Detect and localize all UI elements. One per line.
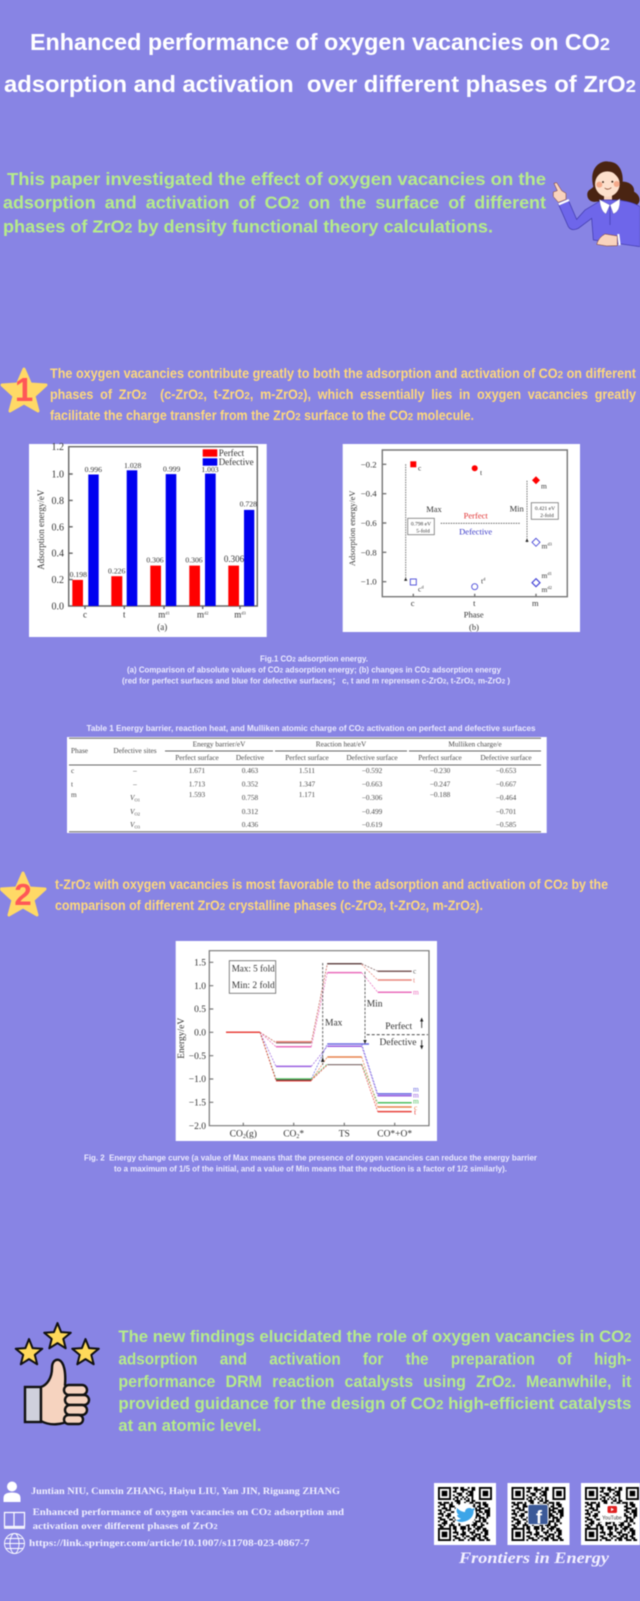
row m: m [71,790,77,799]
x axis labels: CO [283,1130,296,1140]
max and min markers [321,963,383,1065]
x axis labels: (a) [157,622,167,632]
dark level accents [276,964,362,1080]
defective series t d [226,1032,412,1112]
y axis labels: −0.8 [361,547,377,557]
section 2 text: t-ZrO2 with oxygen vacancies is most favorable to the adsorption and activation of CO2 by the [55,877,608,892]
row c: −0.592 [362,766,383,775]
marker labels: d [421,585,424,590]
value labels: 0.996 [85,465,102,474]
x axis labels: c [83,610,87,620]
row c: 0.463 [242,766,259,775]
y axis labels: −0.5 [189,1052,206,1062]
series labels: t [414,1108,417,1116]
marker labels: d [483,576,486,581]
row t: 0.352 [242,780,259,789]
perfect surface markers [410,461,540,484]
icon: globe [4,1534,24,1554]
series labels: t [413,976,416,984]
y axis labels: 1.5 [194,958,206,968]
y axis labels: −0.4 [361,489,377,499]
table title: Table 1 Energy barrier, reaction heat, and Mulliken atomic charge of CO 2 activation on perfect and defective surfaces [86,724,536,733]
row m: V [130,807,134,816]
plot frame and ticks [209,951,429,1126]
header rows: Perfect surface [418,753,462,762]
x axis labels: c [411,598,415,608]
marker labels: c [418,585,421,594]
row m: 0.436 [242,820,259,829]
header rows: Defective [236,753,264,762]
defective series m d1 [260,1032,412,1096]
paper title: activation over different phases of ZrO 2 [33,1522,218,1532]
value labels: 0.728 [240,500,257,509]
conclusion text block: The new findings elucidated the role of oxygen vacancies in CO2 [118,1327,631,1346]
callout: max: 5-fold [416,528,430,534]
row c: −0.653 [496,766,517,775]
icon: thumbs up with stars [16,1323,99,1424]
section 1 text [50,366,636,423]
x axis labels: d3 [241,611,247,616]
plot frame and ticks [69,447,257,609]
row c: – [132,766,137,775]
y axis labels: 1.0 [52,470,64,480]
legend: Perfect [219,448,245,458]
max and min markers: Min [367,1000,383,1010]
marker labels: t [481,576,483,585]
three stars [16,1323,99,1364]
y axis title: Adsorption energy/eV [347,490,357,566]
x axis labels: 2 [296,1134,299,1140]
header rows: Mulliken charge/e [448,740,502,749]
x axis labels: (b) [469,622,479,632]
y axis labels: −2.0 [189,1122,206,1132]
conclusion text block [118,1327,632,1435]
paper title: Enhanced performance of oxygen vacancies on CO 2 adsorption and [33,1508,345,1518]
row c: −0.230 [430,766,451,775]
perfect and defective labels: Perfect [464,510,488,520]
value labels: 0.306 [146,556,164,565]
marker labels: d1 [547,571,552,576]
marker labels [418,464,553,594]
legend [203,448,254,467]
x axis labels: TS [339,1130,350,1140]
header rows: Reaction heat/eV [316,740,367,749]
figure 1 caption: (red for perfect surfaces and blue for defective surfaces； c, t and m reprensen c-ZrO2, t-ZrO2, m-ZrO2 ) [122,677,510,687]
row m: O3 [134,824,141,830]
x axis labels: t [123,610,126,620]
callout: min [510,503,558,519]
figure 1 caption [122,655,510,687]
defective series m d3 [260,1032,412,1103]
x axis labels [411,598,539,632]
row m: O2 [134,812,140,816]
figure 2 caption: to a maximum of 1/5 of the initial, and a value of Min means that the reduction is a factor of 1/2 similarly). [114,1164,507,1174]
y axis labels: −1.0 [361,577,377,587]
x axis labels: d2 [204,611,208,616]
row m: 1.593 [189,790,206,799]
header rows [71,740,532,762]
row m: −0.464 [496,793,517,802]
header rows: Phase [71,746,88,755]
section 2 badge [1,873,45,915]
callout: max: 0.798 eV [411,522,431,528]
y axis labels: 0.4 [52,549,64,560]
paper title [33,1508,345,1532]
value labels: 0.198 [70,570,87,579]
series labels: c [414,1103,418,1112]
intro text block: adsorption and activation of CO 2 on the surface of different [3,193,546,213]
x axis labels: (g) [246,1129,257,1140]
intro text block: This paper investigated the effect of oxygen vacancies on the [7,169,546,189]
scatter chart: adsorption energy by phase [343,444,580,632]
defective series m d2 [260,1032,412,1094]
section 2 text: comparison of different ZrO2 crystalline phases (c-ZrO2, t-ZrO2, m-ZrO2). [55,898,483,913]
header rows: Energy barrier/eV [193,740,246,749]
y axis labels: −0.6 [361,518,377,528]
callout: min: 0.421 eV [535,506,555,512]
x axis labels [230,1129,412,1140]
table: energy barrier, reaction heat, Mulliken charge [67,737,547,833]
row t: −0.247 [430,780,451,789]
row m: O1 [134,798,140,802]
value labels: 1.028 [124,461,142,470]
row t [71,780,517,789]
y axis labels: 0.5 [194,1005,206,1015]
legend box: Max: 5 fold [232,964,275,975]
perfect and defective labels [459,510,492,537]
conclusion text block: performance DRM reaction catalysts using ZrO2. Meanwhile, it [118,1372,632,1391]
figure 2 caption [84,1154,537,1174]
conclusion text block: provided guidance for the design of CO2 high-efficient catalysts [118,1394,631,1413]
x axis labels [83,610,247,632]
series labels: m [413,1084,419,1094]
icon: star [1,873,45,915]
x axis labels: Phase [464,610,484,620]
x axis labels: t [473,598,476,608]
value labels: 0.306 [185,556,203,565]
x axis labels: CO [230,1130,243,1140]
number 2: 2 [14,877,32,912]
y axis labels: 1.0 [194,982,206,992]
row m [71,790,517,830]
x axis labels: CO*+O* [377,1130,412,1140]
value labels: 0.306 [224,554,245,564]
y axis labels: 0.2 [52,575,64,586]
marker labels: m [541,481,547,490]
blue bars [88,470,254,606]
x axis labels: * [299,1130,304,1140]
row m: −0.701 [496,807,517,816]
red bars [72,566,239,606]
y axis labels [361,459,377,587]
row c: 1.671 [189,766,206,775]
journal name: Frontiers in Energy [458,1550,610,1567]
header rows: Defective sites [113,746,157,755]
intro text block: phases of ZrO 2 by density functional theory calculations. [3,217,493,237]
y axis title: Adsorption energy/eV [36,489,46,570]
dashed range lines [406,464,527,582]
row m: −0.619 [362,820,383,829]
row m: −0.585 [496,820,517,829]
value labels: 0.999 [163,464,181,473]
number 1: 1 [15,371,33,408]
perfect / defective divider [367,1018,428,1050]
marker labels: t [480,468,483,477]
palm and thumb [41,1360,70,1424]
bar chart: adsorption energy [29,442,267,637]
figure 2 caption: Fig. 2 Energy change curve (a value of Max means that the presence of oxygen vacancies can reduce the energy barrier [84,1154,537,1163]
header rows: Defective surface [480,753,532,762]
line chart: energy change curve [176,941,437,1141]
series labels: m [413,1096,419,1106]
y axis labels: −1.5 [189,1098,206,1108]
perfect and defective labels: Defective [459,527,492,537]
series labels: m [413,988,419,996]
table rules [69,738,541,832]
icon: presenter girl [553,161,640,247]
plot frame and ticks [382,450,567,597]
conclusion text block: at an atomic level. [118,1416,261,1435]
row t: 1.347 [299,780,316,789]
y axis title: Energy/eV [177,1018,187,1059]
icon: person [4,1482,20,1502]
defective surface markers [410,538,540,590]
perfect series m [260,973,412,1047]
x axis labels: m [197,610,204,620]
x axis labels: 2 [243,1134,246,1140]
intro text block [3,169,546,237]
y axis labels: 1.2 [52,442,64,453]
section 1 badge [2,369,46,411]
row m: −0.499 [362,807,383,816]
x axis labels: m [532,598,539,608]
y axis labels [52,442,64,612]
perfect / defective divider: Defective [380,1037,416,1048]
row m: −0.306 [362,793,383,802]
y axis labels [189,958,206,1132]
row t: −0.667 [496,780,517,789]
row m: 0.312 [242,807,259,816]
icon: youtube logo: YouTube [602,1516,622,1522]
perfect series t [260,964,412,1043]
fingers [64,1385,89,1424]
paper link: https://link.springer.com/article/10.1007/s11708-023-0867-7 [29,1539,310,1549]
marker labels: c [418,464,422,473]
header rows: Defective surface [346,753,398,762]
row m: 0.758 [242,793,259,802]
cuff [25,1387,41,1422]
marker labels: m [542,541,547,550]
marker labels: m [542,571,547,580]
value labels: 0.226 [108,566,126,575]
section 2 text [55,877,608,913]
QR code: Twitter [434,1483,496,1545]
row m: V [130,820,134,829]
QR code: YouTube [581,1483,640,1545]
value labels [70,461,257,579]
marker labels: m [542,585,547,594]
y axis labels: 0.0 [52,602,64,612]
row c [71,766,517,775]
row t: 1.713 [189,780,206,789]
y axis labels: −1.0 [189,1075,206,1085]
perfect / defective divider: Perfect [385,1021,413,1032]
title [4,29,636,97]
icon: facebook logo: f [536,1508,543,1528]
callout: max [408,504,443,535]
series labels [413,966,419,1116]
title: Enhanced performance of oxygen vacancies on CO 2 [30,29,610,55]
icon: twitter bird [454,1503,476,1525]
section 1 text: The oxygen vacancies contribute greatly to both the adsorption and activation of CO2 on different [50,366,636,381]
header rows: Perfect surface [285,753,329,762]
authors: Juntian NIU, Cunxin ZHANG, Haiyu LIU, Yan JIN, Riguang ZHANG [31,1487,341,1497]
legend box [229,961,276,993]
defective series c d [260,1032,412,1107]
icon: star [2,369,46,411]
y axis labels: 0.8 [52,496,64,507]
y axis labels: 0.0 [194,1028,206,1038]
row m: 1.171 [299,790,316,799]
marker labels: d3 [547,541,553,546]
header rows: Perfect surface [175,753,219,762]
x axis labels: d1 [165,611,170,616]
y axis labels: 0.6 [52,522,64,533]
section 1 text: facilitate the charge transfer from the ZrO2 surface to the CO2 molecule. [50,408,474,423]
callout: min: Min [510,503,525,513]
row c: 1.511 [299,766,315,775]
legend: Defective [219,457,254,467]
row t: −0.663 [362,780,383,789]
row m: −0.188 [430,790,451,799]
callout: min: 2-fold [540,512,554,519]
legend box: Min: 2 fold [232,980,275,991]
row t: t [71,780,73,789]
series labels: m [413,1090,419,1100]
figure 1 caption: (a) Comparison of absolute values of CO2 adsorption energy; (b) changes in CO2 adsorption energy [127,666,502,675]
figure 1 caption: Fig.1 CO2 adsorption energy. [260,655,368,664]
series labels: c [413,966,417,976]
value labels: 1.003 [201,465,219,474]
QR code: Facebook [508,1483,570,1545]
marker labels: d2 [547,585,552,590]
x axis labels: m [234,610,241,620]
max and min markers: Max [325,1019,343,1029]
row t: – [132,780,137,789]
row m: V [130,793,134,802]
row c: c [71,766,75,775]
title: adsorption and activation over different phases of ZrO 2 [4,71,636,97]
perfect series c [260,964,412,1043]
x axis labels: m [158,610,165,620]
callout: max: Max [426,504,443,514]
icon: book [4,1512,25,1528]
y axis labels: −0.2 [361,459,377,469]
